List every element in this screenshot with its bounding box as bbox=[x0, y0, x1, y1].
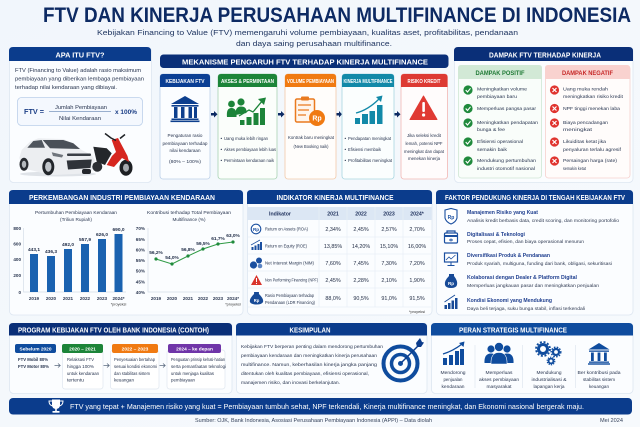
table: indikator: 88,0% bbox=[325, 296, 341, 302]
list: kinerja: Profitabilitas meningkat bbox=[348, 158, 393, 163]
bar chart: pertumbuhan pembiayaan: 557,9 bbox=[79, 237, 91, 243]
line chart: kontribusi: 2019 bbox=[151, 296, 162, 301]
card: kinerja multifinance bbox=[342, 74, 394, 179]
card: kebijakan FTV: KEBIJAKAN FTV bbox=[166, 79, 205, 85]
panel: dampak FTV bbox=[454, 47, 633, 182]
card: volume pembiayaan bbox=[285, 74, 336, 179]
table: indikator: 2,28% bbox=[353, 278, 369, 284]
list: kinerja: • bbox=[344, 158, 346, 163]
item: digitalisasi: Proses cepat, efisien, dan biaya operasional menurun bbox=[467, 239, 584, 245]
list: kinerja: • bbox=[344, 147, 346, 152]
table: indikator bbox=[248, 207, 432, 314]
item: memperluas akses: akses pembiayaan bbox=[479, 377, 519, 382]
text: risiko: meningkat dan dapat bbox=[404, 149, 445, 154]
list: dampak positif: Meningkatkan pendapatan bbox=[477, 120, 538, 125]
list: dampak positif: Mendukung pertumbuhan bbox=[477, 158, 536, 163]
arrow bbox=[211, 111, 218, 118]
item: mendorong penjualan: Mendorong bbox=[440, 370, 466, 375]
list: dampak negatif: Persaingan harga (rate) bbox=[563, 158, 618, 163]
line chart: kontribusi: 56,8% bbox=[181, 247, 196, 253]
list: akses bbox=[220, 136, 277, 163]
bar chart: pertumbuhan pembiayaan: 2023 bbox=[97, 296, 108, 301]
icon: clipboard dan rupiah: Rp bbox=[312, 116, 322, 122]
arrow bbox=[54, 364, 60, 368]
icon: LDR: Rp bbox=[254, 298, 260, 303]
table: indikator: *proyeksi bbox=[409, 309, 425, 314]
text: kebijakan: pembiayaan terhadap bbox=[162, 141, 208, 146]
line chart: kontribusi: 70% bbox=[136, 226, 145, 231]
bar chart: pertumbuhan pembiayaan: 626,0 bbox=[96, 232, 108, 238]
bar chart: pertumbuhan pembiayaan: 690,0 bbox=[112, 227, 125, 233]
item: diversifikasi: Diversifikasi Produk & Pendanaan bbox=[467, 253, 550, 259]
bar chart: pertumbuhan pembiayaan: 436,3 bbox=[45, 249, 57, 255]
line chart: kontribusi: 40% bbox=[136, 290, 145, 295]
item: mendorong penjualan: kendaraan bbox=[442, 384, 465, 389]
line chart: kontribusi: 56,2% bbox=[149, 250, 164, 256]
list: akses: Uang muka lebih ringan bbox=[224, 136, 268, 141]
line chart: kontribusi: 65% bbox=[136, 237, 145, 242]
heading: apa itu FTV: APA ITU FTV? bbox=[56, 52, 104, 60]
line chart: kontribusi: 55% bbox=[136, 258, 145, 263]
list: dampak negatif: semakin ketat bbox=[563, 166, 587, 171]
list: akses: Permintaan kendaraan naik bbox=[224, 158, 275, 163]
formula FTV: x 100% bbox=[115, 109, 137, 116]
table: indikator: 2023 bbox=[383, 212, 395, 218]
line chart: kontribusi: 2022 bbox=[198, 296, 209, 301]
table: indikator: 90,5% bbox=[353, 296, 369, 302]
heading: mekanisme: MEKANISME PENGARUH FTV TERHADAP KINERJA MULTIFINANCE bbox=[182, 60, 428, 66]
table: indikator: 2,70% bbox=[409, 227, 425, 233]
list: kinerja: Pendapatan meningkat bbox=[348, 136, 392, 141]
icon: ROA: Rp bbox=[253, 227, 259, 232]
table: indikator: 14,20% bbox=[352, 244, 370, 250]
list: dampak positif: industri otomotif nasional bbox=[477, 166, 535, 171]
text: risiko bbox=[404, 133, 445, 161]
table: indikator: Pendanaan (LDR Financing) bbox=[265, 300, 315, 305]
line chart: kontribusi: Kontribusi terhadap Total Pembiayaan bbox=[147, 210, 231, 215]
table: indikator: 13,85% bbox=[324, 244, 342, 250]
line chart: kontribusi: 63,0% bbox=[226, 233, 241, 239]
list: dampak negatif: Biaya pencadangan bbox=[563, 120, 608, 125]
item: kondisi ekonomi: Daya beli terjaga, suku bunga stabil, inflasi terkendali bbox=[467, 306, 585, 312]
text: volume: (New Booking naik) bbox=[294, 144, 329, 149]
list: dampak positif: Memperluas pangsa pasar bbox=[477, 106, 537, 111]
step: sebelum 2020: Sebelum 2020 bbox=[20, 346, 52, 352]
text: kesimpulan: multifinance. Namun, keberhasilan kinerja jangka panjang bbox=[241, 362, 377, 367]
list: akses: • bbox=[220, 147, 222, 152]
bar chart: pertumbuhan pembiayaan: 600 bbox=[13, 242, 21, 246]
step: 2020-2021: 2020 – 2021 bbox=[69, 346, 96, 352]
illustration: mobil putih bbox=[19, 138, 96, 176]
text: definisi FTV: pembiayaan yang diberikan lembaga pembiayaan bbox=[15, 76, 144, 82]
icon: peringatan bbox=[410, 96, 437, 120]
arrow bbox=[160, 364, 165, 368]
step: 2020-2021: tertentu bbox=[67, 378, 84, 382]
step: 2024 ke depan: pembiayaan bbox=[171, 378, 195, 382]
table: indikator: 2024* bbox=[410, 212, 425, 218]
step: 2022-2023: Penyesuaian bertahap bbox=[114, 357, 155, 362]
list: akses: Akses pembiayaan lebih luas bbox=[224, 147, 277, 152]
table: indikator: 91,5% bbox=[409, 296, 425, 302]
step: 2024 ke depan: 2024 – ke depan bbox=[176, 346, 213, 352]
card: dampak positif bbox=[458, 65, 542, 178]
arrow bbox=[336, 111, 342, 118]
bar chart: pertumbuhan pembiayaan: 2019 bbox=[29, 296, 40, 301]
item: manajemen risiko: Rp bbox=[448, 215, 454, 221]
item: stabilitas keuangan: stabilitas sistem bbox=[583, 377, 615, 382]
icons: tanda silang bbox=[550, 85, 559, 166]
step: 2022-2023: 2022 – 2023 bbox=[122, 346, 149, 352]
item: manajemen risiko: Manajemen Risiko yang Kuat bbox=[467, 210, 538, 216]
table: indikator: 1,90% bbox=[409, 278, 425, 284]
heading: dampak: DAMPAK FTV TERHADAP KINERJA bbox=[489, 52, 601, 59]
line chart: kontribusi: 54,0% bbox=[165, 255, 180, 261]
item: kolaborasi: Rp bbox=[448, 281, 454, 286]
icon: ROA bbox=[251, 224, 261, 234]
item: kondisi ekonomi bbox=[444, 295, 585, 312]
line chart: kontribusi: *proyeksi bbox=[225, 302, 241, 306]
table: indikator: 15,10% bbox=[380, 244, 398, 250]
text: kesimpulan: manajemen risiko, dan inovasi berkelanjutan. bbox=[241, 380, 340, 385]
item: kondisi ekonomi: Kondisi Ekonomi yang Mendukung bbox=[467, 298, 552, 304]
arrow bbox=[394, 111, 400, 118]
bar chart: pertumbuhan pembiayaan bbox=[13, 210, 126, 306]
line chart: kontribusi: 2024* bbox=[227, 296, 239, 301]
line chart: kontribusi: 59,5% bbox=[196, 241, 211, 247]
icon: grafik batang naik bbox=[355, 96, 382, 124]
bar chart: pertumbuhan pembiayaan: 2020 bbox=[46, 296, 57, 301]
text: kebijakan: (80% – 100%) bbox=[169, 159, 202, 164]
item: kolaborasi bbox=[445, 274, 599, 289]
item: memperluas akses bbox=[479, 342, 519, 389]
bar chart: pertumbuhan pembiayaan: 800 bbox=[13, 226, 21, 231]
step: sebelum 2020 bbox=[15, 344, 56, 369]
item: diversifikasi: Produk syariah, multiguna, funding dari bank, obligasi, sekuritisasi bbox=[467, 261, 612, 267]
card: dampak positif: DAMPAK POSITIF bbox=[476, 70, 525, 77]
bar chart: pertumbuhan pembiayaan: 200 bbox=[13, 273, 21, 278]
panel: kesimpulan bbox=[236, 323, 427, 394]
icon: NPF bbox=[251, 275, 262, 285]
card: dampak negatif bbox=[545, 65, 630, 178]
item: digitalisasi bbox=[444, 231, 584, 245]
item: kolaborasi: Memperluas jangkauan pasar dan meningkatkan penjualan bbox=[467, 283, 599, 289]
formula FTV: Jumlah Pembiayaan bbox=[55, 105, 107, 111]
list: dampak positif: Meningkatkan volume bbox=[477, 86, 527, 92]
step: 2024 ke depan: serta pemanfaatan teknologi bbox=[171, 364, 226, 369]
table: indikator: Indikator bbox=[269, 212, 291, 218]
item: digitalisasi: Digitalisasi & Teknologi bbox=[467, 232, 525, 238]
icon: gedung bank bbox=[170, 96, 200, 122]
card: dampak negatif: DAMPAK NEGATIF bbox=[562, 70, 613, 77]
text: definisi FTV: FTV (Financing to Value) adalah rasio maksimum bbox=[15, 68, 141, 74]
step: 2020-2021: hingga 100% bbox=[67, 364, 94, 369]
icon: target dan anak panah bbox=[384, 338, 424, 380]
step: 2020-2021: untuk kendaraan bbox=[67, 371, 99, 376]
line chart: kontribusi: 45% bbox=[136, 279, 145, 284]
panel: mekanisme pengaruh FTV bbox=[160, 54, 448, 179]
list: dampak negatif: Likuiditas ketat jika bbox=[563, 139, 606, 144]
bar chart: pertumbuhan pembiayaan: 2024* bbox=[112, 296, 125, 301]
tanggal: Mei 2024 bbox=[600, 418, 623, 424]
list: dampak negatif: meningkat bbox=[563, 127, 593, 132]
line chart: kontribusi: Multifinance (%) bbox=[172, 217, 206, 222]
step: 2020-2021: Relaksasi FTV bbox=[67, 357, 95, 362]
card: risiko kredit bbox=[401, 74, 448, 179]
list: dampak positif: Efisiensi operasional bbox=[477, 139, 523, 144]
card: akses dan permintaan bbox=[218, 74, 277, 179]
text: definisi FTV: terhadap nilai kendaraan yang dibiayai. bbox=[15, 85, 117, 91]
subtitle: dan daya saing perusahaan multifinance. bbox=[236, 39, 392, 48]
subtitle bbox=[97, 28, 518, 48]
step: 2020-2021 bbox=[62, 344, 103, 389]
card: kebijakan FTV bbox=[160, 74, 210, 179]
item: mendukung industrialisasi: lapangan kerja bbox=[534, 384, 565, 389]
list: dampak positif: pembiayaan baru bbox=[477, 94, 517, 99]
heading: perkembangan: PERKEMBANGAN INDUSTRI PEMBIAYAAN KENDARAAN bbox=[29, 195, 215, 202]
step: 2024 ke depan: Penguatan prinsip kehati-hatian bbox=[171, 357, 225, 362]
step: 2024 ke depan bbox=[167, 344, 226, 389]
step: 2022-2023: sesuai kondisi ekonomi bbox=[114, 364, 157, 369]
bar chart: pertumbuhan pembiayaan: Pertumbuhan Pembiayaan Kendaraan bbox=[35, 210, 117, 215]
icon: orang dan grafik naik bbox=[227, 98, 266, 125]
item: mendorong penjualan: penjualan bbox=[444, 377, 463, 382]
item: mendukung industrialisasi bbox=[532, 342, 566, 389]
arrow bbox=[104, 364, 109, 368]
text: kesimpulan bbox=[241, 344, 383, 385]
panel: faktor pendukung bbox=[436, 190, 633, 315]
list: dampak negatif bbox=[563, 86, 624, 171]
card: kinerja multifinance: KINERJA MULTIFINANCE bbox=[344, 79, 393, 85]
list: dampak positif: semakin baik bbox=[477, 147, 508, 152]
heading: peran strategis: PERAN STRATEGIS MULTIFINANCE bbox=[459, 328, 567, 334]
line chart: kontribusi: 60% bbox=[136, 248, 145, 252]
panel: perkembangan industri bbox=[9, 190, 243, 315]
bar chart: pertumbuhan pembiayaan: 2021 bbox=[63, 296, 74, 301]
table: indikator: Net Interest Margin (NIM) bbox=[265, 260, 314, 266]
bar chart: pertumbuhan pembiayaan: 400 bbox=[13, 257, 21, 262]
list: dampak negatif: Uang muka rendah bbox=[563, 86, 609, 92]
item: diversifikasi bbox=[444, 253, 612, 267]
line chart: kontribusi: 2023 bbox=[213, 296, 224, 301]
list: dampak positif bbox=[477, 86, 538, 171]
bar chart: pertumbuhan pembiayaan: (Triliun Rupiah) bbox=[60, 217, 92, 222]
formula FTV bbox=[18, 98, 142, 126]
bar chart: pertumbuhan pembiayaan: 443,1 bbox=[28, 247, 40, 253]
table: indikator: 2,57% bbox=[381, 227, 397, 233]
text: kesimpulan: ditentukan oleh kualitas pembiayaan, efisiensi operasional, bbox=[241, 371, 369, 376]
table: indikator: 2022 bbox=[355, 212, 367, 218]
text: kesimpulan: Kebijakan FTV berperan penting dalam mendorong pertumbuhan bbox=[241, 344, 383, 349]
illustration: sepeda motor merah bbox=[92, 134, 132, 176]
arrow bbox=[278, 111, 284, 118]
step: 2022-2023: dan stabilitas sistem bbox=[114, 371, 150, 376]
banner: kesimpulan utama bbox=[9, 398, 632, 414]
text: volume: Kontrak baru meningkat bbox=[288, 135, 335, 140]
table: indikator: Non Performing Financing (NPF) bbox=[265, 278, 318, 282]
text: risiko: Jika seleksi kredit bbox=[407, 133, 442, 138]
step: 2024 ke depan: untuk menjaga kualitas bbox=[171, 371, 215, 376]
step: 2022-2023 bbox=[110, 344, 159, 389]
panel: peran strategis bbox=[431, 323, 633, 394]
item: manajemen risiko: Analisis kredit berbasis data, credit scoring, dan monitoring portofolio bbox=[467, 218, 619, 224]
list: kinerja: • bbox=[344, 136, 346, 141]
table: indikator: 2021 bbox=[327, 212, 339, 218]
table: indikator: 7,20% bbox=[409, 261, 425, 267]
list: dampak negatif: NPF tinggi menekan laba bbox=[563, 106, 620, 111]
table: indikator: 7,45% bbox=[353, 261, 369, 267]
table: indikator: 7,30% bbox=[381, 261, 397, 267]
bar chart: pertumbuhan pembiayaan: 0 bbox=[18, 290, 21, 295]
line chart: kontribusi: 50% bbox=[136, 269, 145, 274]
card: risiko kredit: RISIKO KREDIT bbox=[408, 79, 441, 85]
heading: program: PROGRAM KEBIJAKAN FTV OLEH BANK INDONESIA (CONTOH) bbox=[18, 328, 209, 334]
item: stabilitas keuangan: keuangan bbox=[589, 384, 609, 389]
text: kebijakan bbox=[162, 133, 208, 164]
subtitle: Kebijakan Financing to Value (FTV) memengaruhi volume pembiayaan, kualitas aset, profitabilitas, pendanaan bbox=[97, 28, 518, 37]
table: indikator: 2,45% bbox=[353, 227, 369, 233]
list: akses: • bbox=[220, 158, 222, 163]
banner: kesimpulan utama: FTV yang tepat + Manajemen risiko yang kuat = Pembiayaan tumbuh sehat, NPF terkendali, Kinerja multifinance meningkat, dan Ekonomi nasional bergerak maju. bbox=[70, 402, 584, 411]
text: risiko: lemah, potensi NPF bbox=[406, 141, 443, 146]
line chart: kontribusi: 2020 bbox=[167, 296, 178, 301]
table: indikator: Rasio Pembiayaan terhadap bbox=[265, 293, 314, 298]
step: 2022-2023: keuangan bbox=[114, 378, 134, 382]
item: mendukung industrialisasi: Mendukung bbox=[536, 370, 562, 375]
step: sebelum 2020: FTV Motor 80% bbox=[18, 364, 49, 369]
icon: ROE bbox=[251, 240, 262, 250]
icon: NIM bbox=[250, 258, 262, 269]
line chart: kontribusi bbox=[136, 210, 241, 306]
heading: mekanisme bbox=[160, 54, 448, 68]
table: indikator: 2,34% bbox=[325, 227, 341, 233]
item: memperluas akses: masyarakat bbox=[486, 384, 512, 389]
bar chart: pertumbuhan pembiayaan: 492,0 bbox=[62, 242, 74, 248]
text: kesimpulan: pembiayaan kendaraan dan meningkatkan kinerja perusahaan bbox=[241, 353, 377, 358]
item: stabilitas keuangan: Ber kontribusi pada bbox=[578, 370, 621, 375]
table: indikator: 91,0% bbox=[381, 296, 397, 302]
text: kebijakan: Pengaturan rasio bbox=[168, 133, 203, 138]
item: kolaborasi: Kolaborasi dengan Dealer & Platform Digital bbox=[467, 275, 577, 281]
icon: piala bbox=[49, 400, 63, 413]
line chart: kontribusi: 61,7% bbox=[211, 236, 226, 242]
text: kebijakan: nilai kendaraan bbox=[170, 148, 201, 153]
list: dampak positif: bunga & fee bbox=[477, 127, 505, 132]
step: sebelum 2020: FTV Mobil 80% bbox=[18, 357, 48, 362]
list: dampak negatif: meningkatkan risiko kredit bbox=[563, 94, 624, 99]
text: volume bbox=[288, 135, 335, 149]
bar chart: pertumbuhan pembiayaan: 2022 bbox=[80, 296, 91, 301]
table: indikator: Return on Equity (ROE) bbox=[265, 244, 307, 248]
heading: indikator: INDIKATOR KINERJA MULTIFINANCE bbox=[276, 195, 394, 202]
list: kinerja bbox=[344, 136, 393, 163]
icon: LDR bbox=[250, 292, 263, 304]
table: indikator: 16,00% bbox=[408, 244, 426, 250]
list: dampak negatif: penyaluran terlalu agresif bbox=[563, 147, 622, 152]
sumber: Sumber: OJK, Bank Indonesia, Asosiasi Perusahaan Pembiayaan Indonesia (APPI) – Data diolah bbox=[195, 418, 432, 424]
list: kinerja: Efisiensi membaik bbox=[348, 147, 382, 152]
icons: tanda centang bbox=[463, 85, 473, 166]
item: memperluas akses: Memperluas bbox=[486, 370, 513, 375]
bar chart: pertumbuhan pembiayaan: *proyeksi bbox=[111, 302, 126, 306]
text: risiko: menekan kinerja bbox=[408, 156, 440, 161]
panel: apa itu FTV bbox=[9, 47, 152, 182]
text: definisi FTV bbox=[15, 68, 144, 91]
item: manajemen risiko bbox=[445, 208, 619, 224]
table: indikator: 2,10% bbox=[381, 278, 397, 284]
line chart: kontribusi: 2021 bbox=[183, 296, 194, 301]
panel: program kebijakan bbox=[9, 323, 232, 394]
heading: kesimpulan: KESIMPULAN bbox=[290, 328, 330, 334]
panel: indikator kinerja bbox=[247, 190, 432, 315]
table: indikator: Return on Assets (ROA) bbox=[265, 226, 308, 232]
formula FTV: FTV = bbox=[24, 109, 44, 116]
card: volume pembiayaan: VOLUME PEMBIAYAAN bbox=[287, 79, 334, 85]
table: indikator: 7,60% bbox=[325, 261, 341, 267]
list: akses: • bbox=[220, 136, 222, 141]
card: akses dan permintaan: AKSES & PERMINTAAN bbox=[221, 79, 274, 85]
table: indikator: 2,45% bbox=[325, 278, 341, 284]
item: stabilitas keuangan bbox=[578, 343, 621, 389]
item: mendukung industrialisasi: industrialisasi & bbox=[532, 377, 566, 382]
item: mendorong penjualan bbox=[440, 342, 466, 389]
formula FTV: Nilai Kendaraan bbox=[59, 116, 101, 122]
